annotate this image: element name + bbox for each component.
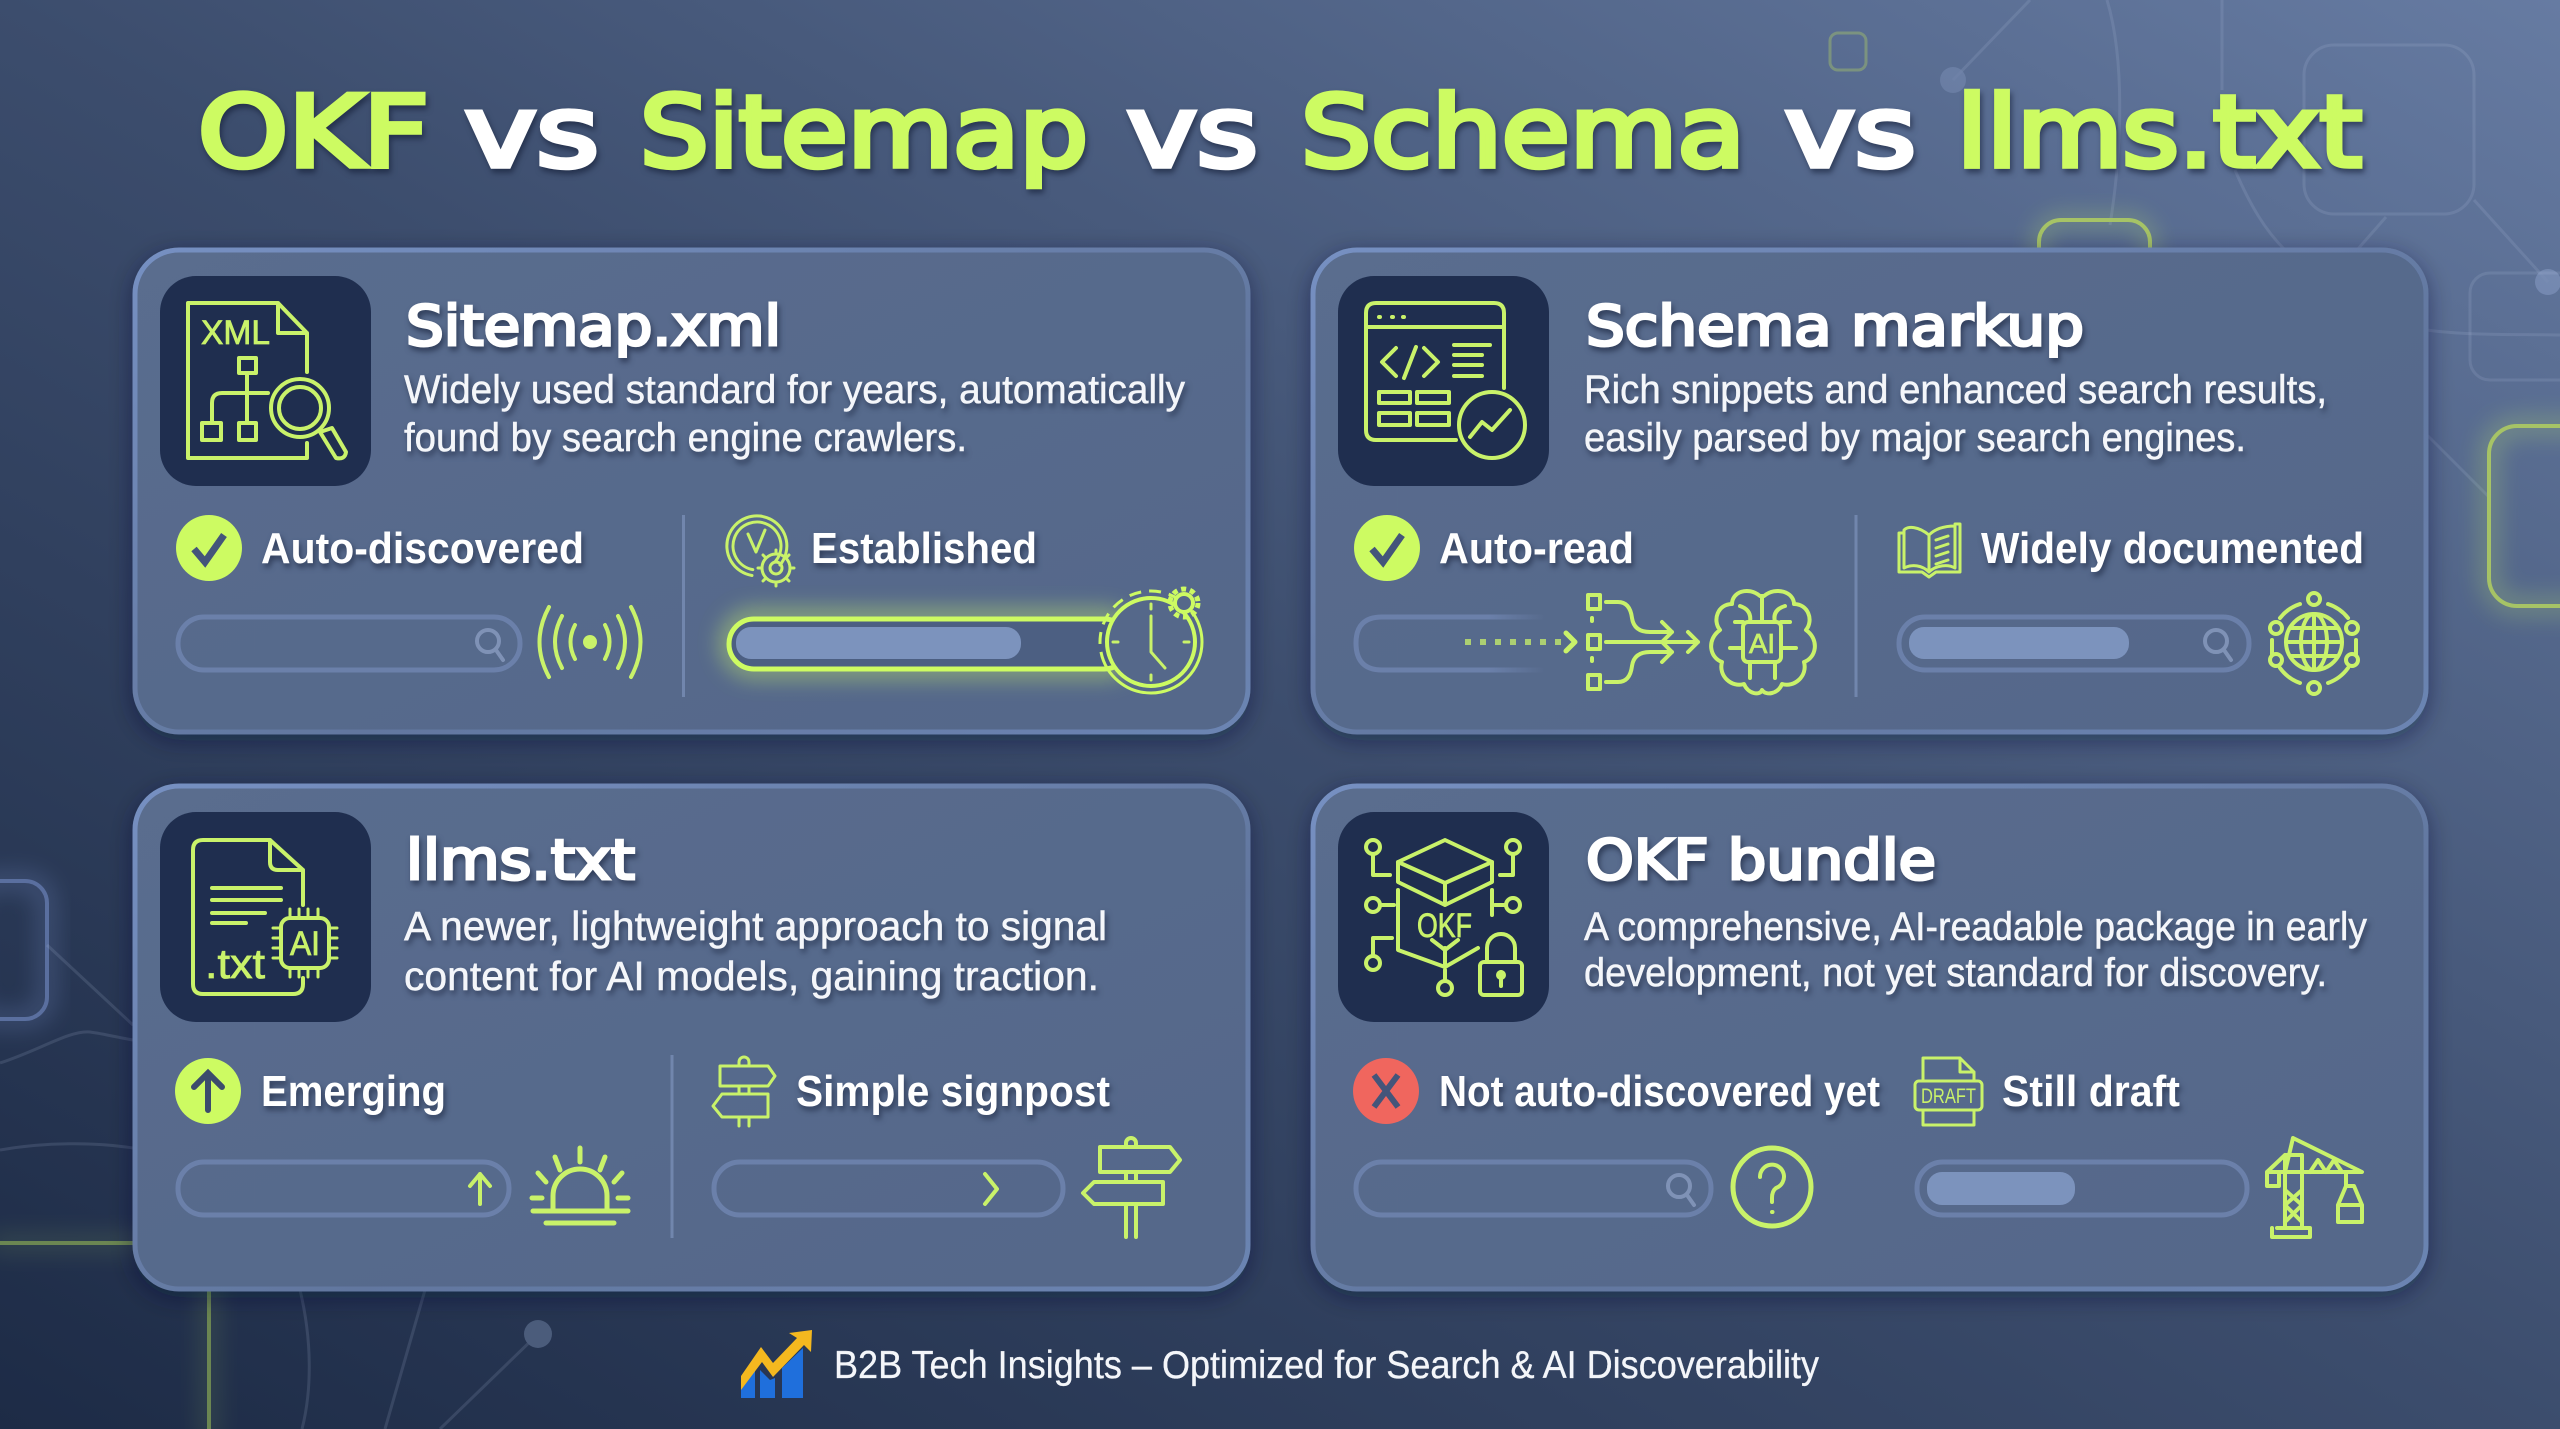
card background bbox=[1313, 250, 2426, 732]
icon tile: OKF cube: OKF bbox=[1417, 907, 1472, 945]
footer bbox=[741, 1330, 1819, 1398]
icon tile: schema code window bbox=[1338, 276, 1549, 486]
card background bbox=[1313, 786, 2426, 1289]
description bbox=[1584, 368, 2327, 460]
title: vs bbox=[1785, 76, 1916, 190]
icon tile: OKF cube bbox=[1338, 812, 1549, 1022]
icon: check bbox=[176, 515, 242, 581]
icon tile: txt file with AI chip: AI bbox=[290, 925, 320, 963]
title bbox=[198, 76, 2362, 190]
label: Still draft: Still draft bbox=[2002, 1067, 2180, 1116]
progress bar with crane bbox=[1917, 1138, 2362, 1237]
icon: check bbox=[1354, 515, 1420, 581]
description: development, not yet standard for discovery. bbox=[1584, 951, 2327, 995]
bar with data flow into AI brain: AI bbox=[1749, 628, 1775, 659]
bar with sunrise bbox=[178, 1148, 628, 1223]
search bar with signal bbox=[178, 607, 640, 677]
card background bbox=[135, 250, 1248, 732]
description: A newer, lightweight approach to signal bbox=[404, 903, 1107, 949]
title: OKF bbox=[198, 76, 429, 190]
description: A comprehensive, AI-readable package in early bbox=[1584, 905, 2367, 949]
description: found by search engine crawlers. bbox=[404, 416, 967, 460]
description bbox=[1584, 905, 2367, 995]
search bar with globe bbox=[1899, 593, 2358, 694]
panel: Sitemap.xml bbox=[135, 250, 1248, 732]
label: Simple signpost: Simple signpost bbox=[796, 1067, 1110, 1116]
panel: OKF bundle bbox=[1313, 786, 2426, 1289]
heading: llms.txt bbox=[406, 828, 635, 892]
card background bbox=[135, 786, 1248, 1289]
title: Sitemap bbox=[640, 76, 1088, 190]
panel: Schema markup bbox=[1313, 250, 2426, 732]
description: Widely used standard for years, automatically bbox=[404, 368, 1185, 412]
bar with data flow into AI brain bbox=[1356, 591, 1815, 693]
title: vs bbox=[465, 76, 599, 190]
label: Emerging: Emerging bbox=[261, 1067, 446, 1116]
heading: Schema markup bbox=[1586, 294, 2084, 358]
glowing progress bar with clock bbox=[729, 589, 1202, 693]
label: Auto-read: Auto-read bbox=[1439, 524, 1634, 573]
icon: draft document: DRAFT bbox=[1921, 1085, 1976, 1108]
icon: cross badge bbox=[1353, 1058, 1419, 1124]
icon: small signpost bbox=[713, 1057, 775, 1126]
label: Auto-discovered: Auto-discovered bbox=[261, 524, 584, 573]
description: content for AI models, gaining traction. bbox=[404, 953, 1099, 999]
description bbox=[404, 368, 1185, 460]
title: Schema bbox=[1301, 76, 1745, 190]
icon tile: txt file with AI chip: .txt bbox=[205, 940, 265, 987]
icon tile: txt file with AI chip bbox=[160, 812, 371, 1022]
heading: Sitemap.xml bbox=[406, 294, 781, 358]
label: Widely documented: Widely documented bbox=[1981, 524, 2364, 573]
description: Rich snippets and enhanced search results, bbox=[1584, 368, 2327, 412]
icon: growth chart logo bbox=[741, 1330, 812, 1398]
description bbox=[404, 903, 1107, 999]
search bar with question mark bbox=[1356, 1148, 1811, 1226]
icon: up arrow badge bbox=[175, 1058, 241, 1124]
icon: clock and gear bbox=[727, 516, 794, 586]
label: Not auto-discovered yet: Not auto-discovered yet bbox=[1439, 1067, 1880, 1116]
description: easily parsed by major search engines. bbox=[1584, 416, 2246, 460]
icon tile: XML sitemap: XML bbox=[201, 314, 270, 352]
title: llms.txt bbox=[1957, 76, 2362, 190]
label: Established: Established bbox=[811, 524, 1037, 573]
heading: OKF bundle bbox=[1586, 828, 1936, 892]
icon: draft document bbox=[1915, 1058, 1982, 1125]
footer text: B2B Tech Insights – Optimized for Search & AI Discoverability bbox=[834, 1344, 1819, 1387]
title: vs bbox=[1127, 76, 1258, 190]
icon: book bbox=[1899, 524, 1960, 577]
bar with signpost bbox=[714, 1138, 1180, 1237]
panel: llms.txt bbox=[135, 786, 1248, 1289]
icon tile: XML sitemap bbox=[160, 276, 371, 486]
